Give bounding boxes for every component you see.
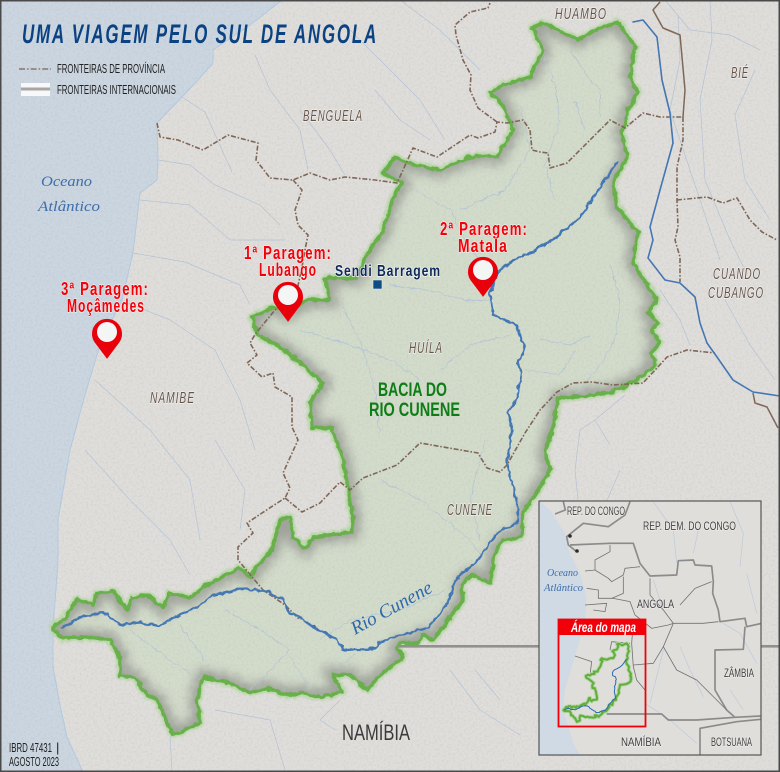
ocean bbox=[0, 0, 282, 772]
basin fill bbox=[53, 22, 660, 735]
source note: AGOSTO 2023 bbox=[9, 754, 59, 769]
basin label: BACIA DO bbox=[378, 380, 447, 401]
inset: ocean and country borders bbox=[539, 500, 762, 755]
inset: ocean label: Oceano bbox=[547, 568, 578, 579]
inset: labels bbox=[567, 504, 754, 749]
stop 2: Matala: Matala bbox=[458, 236, 508, 256]
river basin bbox=[53, 22, 660, 735]
basin outline bbox=[53, 22, 660, 735]
source note: IBRD 47431 bbox=[9, 740, 52, 755]
inset locator map bbox=[539, 500, 762, 755]
legend: international border: FRONTEIRAS INTERNACIONAIS bbox=[57, 82, 176, 97]
source note: | bbox=[56, 740, 59, 755]
ocean label bbox=[37, 174, 101, 215]
source note bbox=[9, 740, 59, 769]
inset: map area box: Área do mapa bbox=[570, 619, 636, 635]
province labels bbox=[150, 6, 764, 519]
province labels: HUÍLA bbox=[409, 338, 443, 357]
inset: labels: BOTSUANA bbox=[711, 735, 752, 749]
province labels: BENGUELA bbox=[303, 108, 363, 125]
basin label: RIO CUNENE bbox=[369, 400, 460, 421]
stop 1: Lubango bbox=[244, 243, 332, 321]
stop 1: Lubango: 1ª Paragem: bbox=[244, 243, 332, 263]
title: UMA VIAGEM PELO SUL DE ANGOLA bbox=[22, 19, 378, 49]
province labels: BIÉ bbox=[731, 63, 749, 82]
inset: ocean label: Atlântico bbox=[543, 583, 583, 594]
stop 3: Moçâmedes bbox=[61, 279, 149, 358]
province labels: HUAMBO bbox=[555, 6, 607, 23]
province labels: CUNENE bbox=[447, 502, 493, 519]
inset: labels: NAMÍBIA bbox=[621, 734, 661, 749]
inner shadow bbox=[53, 22, 660, 735]
inset: map area box bbox=[558, 619, 646, 726]
inset: ocean label bbox=[543, 568, 583, 594]
inset: towns bbox=[568, 534, 579, 553]
Namibia label: NAMÍBIA bbox=[342, 720, 410, 745]
inset: labels: ANGOLA bbox=[637, 597, 674, 611]
legend bbox=[19, 61, 176, 97]
basin label bbox=[369, 380, 460, 421]
dam label and marker bbox=[335, 263, 441, 289]
inset: basin outline bbox=[563, 643, 631, 722]
ocean label: Atlântico bbox=[37, 199, 101, 215]
inset: labels: REP. DEM. DO CONGO bbox=[643, 519, 736, 533]
basin minor rivers bbox=[130, 45, 620, 690]
stop 3: Moçâmedes: 3ª Paragem: bbox=[61, 279, 149, 299]
basin halo bbox=[53, 22, 660, 735]
stop 3: Moçâmedes: Moçâmedes bbox=[67, 296, 145, 316]
province labels: NAMIBE bbox=[150, 390, 195, 407]
dam label and marker: Sendi Barragem bbox=[335, 263, 441, 280]
international border bbox=[398, 645, 780, 648]
stop 2: Matala: 2ª Paragem: bbox=[440, 219, 528, 239]
legend: international border bbox=[21, 82, 176, 97]
province borders bbox=[157, 2, 778, 620]
inset: labels: ZÂMBIA bbox=[724, 665, 754, 680]
inset: frame bbox=[539, 501, 761, 755]
river: Rio Cunene bbox=[62, 162, 617, 650]
stop 2: Matala bbox=[440, 219, 528, 296]
stop 1: Lubango: Lubango bbox=[259, 260, 317, 280]
inset: labels: REP. DO CONGO bbox=[567, 504, 625, 518]
legend: province border: FRONTEIRAS DE PROVÍNCIA bbox=[57, 61, 165, 76]
river label: Rio Cunene bbox=[346, 577, 436, 640]
ocean label: Oceano bbox=[41, 174, 93, 190]
river: eastern tributary bbox=[633, 20, 780, 396]
